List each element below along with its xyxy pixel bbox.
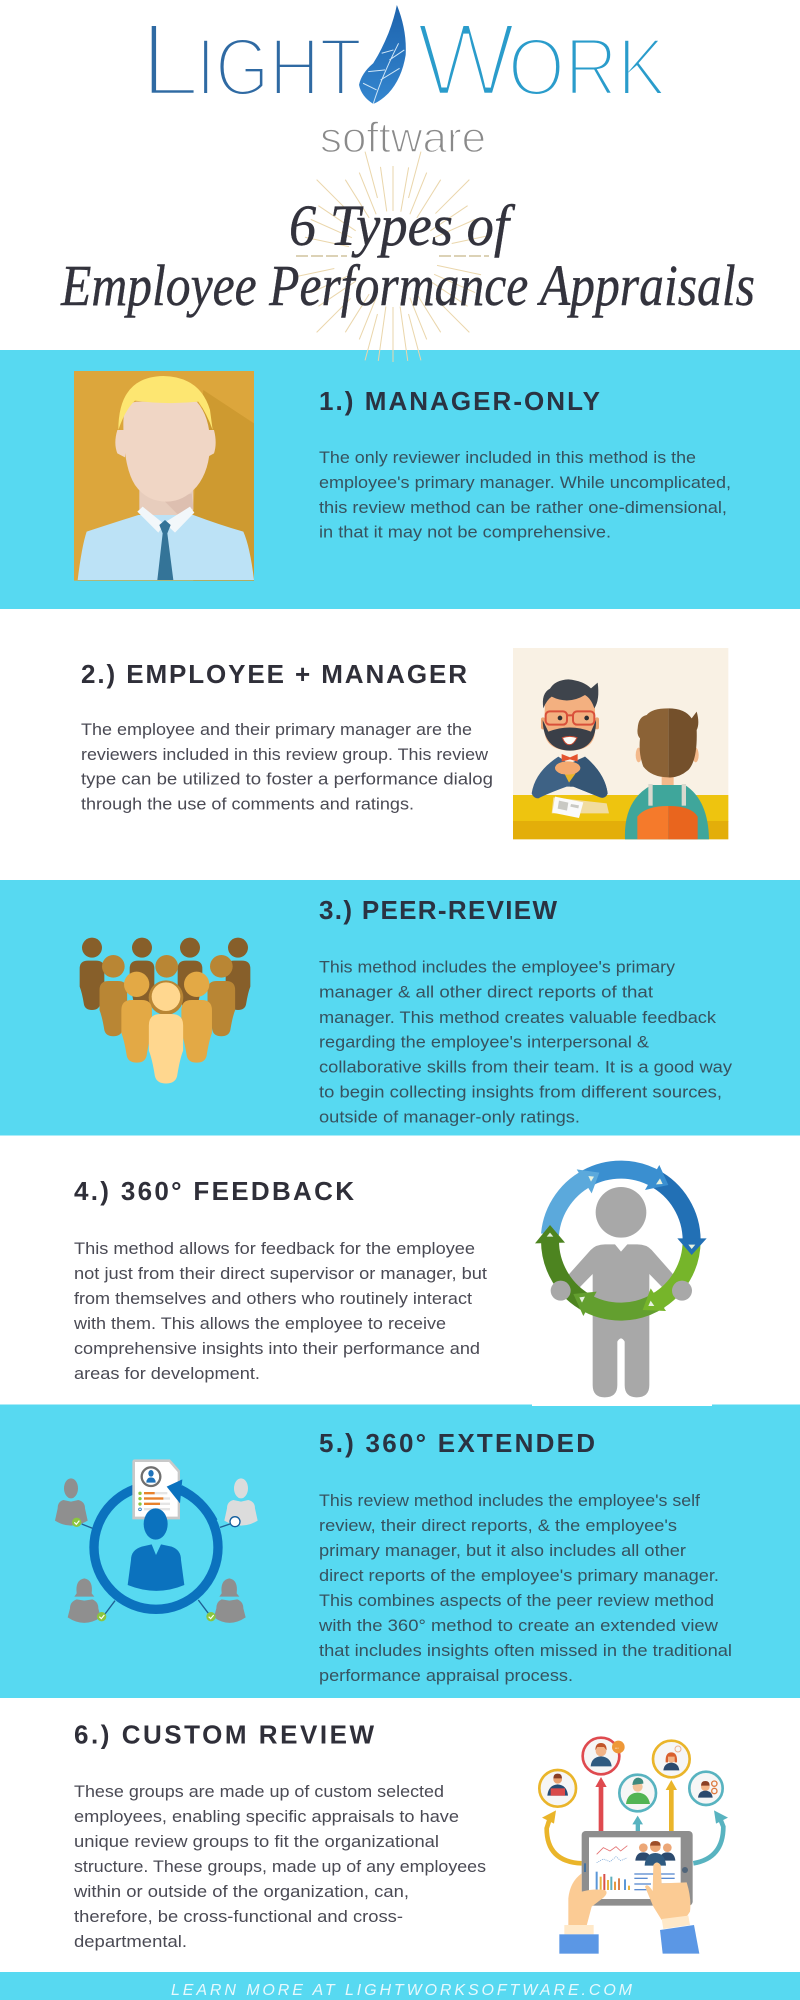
panel: peer-review band — [0, 880, 800, 1136]
logo: LightWork software: W — [416, 2, 516, 119]
text block: custom review description: within or outside of the organization, can, — [73, 1882, 409, 1901]
text block: 360 feedback description: comprehensive insights into their performance and — [74, 1339, 480, 1358]
text block: 360 extended description — [318, 1491, 732, 1685]
heading: 2 employee + manager: 2.) EMPLOYEE + MANAGER — [81, 659, 467, 689]
panel: 360 extended band — [0, 1404, 800, 1698]
text block: 360 feedback description: areas for development. — [74, 1364, 260, 1383]
text block: employee + manager description: reviewers included in this review group. This review — [81, 745, 489, 764]
text block: peer-review description: to begin collecting insights from different sources, — [319, 1082, 722, 1102]
footer: learn more banner — [0, 1972, 800, 2000]
heading: 5 360 extended: 5.) 360° EXTENDED — [319, 1428, 595, 1458]
text block: manager-only description: in that it may not be comprehensive. — [319, 522, 611, 542]
heading: 1 manager-only: 1.) MANAGER-ONLY — [319, 386, 600, 416]
icon: group of people — [80, 938, 250, 1084]
text block: 360 extended description: primary manager, but it also includes all other — [319, 1541, 686, 1560]
text block: 360 extended description: direct reports of the employee's primary manager. — [319, 1566, 719, 1585]
text block: 360 extended description: with the 360° method to create an extended view — [318, 1616, 719, 1635]
text block: 360 extended description: review, their direct reports, & the employee's — [319, 1516, 677, 1535]
title: 6 Types of Employee Performance Appraisals: 6 Types of — [289, 193, 515, 258]
text block: 360 extended description: that includes insights often missed in the traditional — [319, 1641, 732, 1660]
text block: 360 extended description: This review method includes the employee's self — [319, 1491, 700, 1510]
icon: tablet with employee review groups: ... — [615, 1745, 619, 1751]
heading: 3 peer-review: 3.) PEER-REVIEW — [319, 895, 557, 925]
icon: manager portrait — [74, 371, 254, 581]
logo: LightWork software: software — [320, 114, 486, 162]
text block: 360 feedback description — [73, 1239, 487, 1383]
text block: employee + manager description: through the use of comments and ratings. — [81, 794, 414, 814]
icon: blue feather — [359, 5, 406, 104]
text block: employee + manager description: type can be utilized to foster a performance dialog — [81, 770, 493, 788]
panel: custom review — [73, 1720, 728, 1954]
text block: custom review description: employees, enabling specific appraisals to have — [74, 1807, 459, 1826]
panel: manager-only band — [0, 350, 800, 609]
text block: manager-only description: employee's primary manager. While uncomplicated, — [319, 473, 731, 492]
burst: tan sunburst behind title — [294, 152, 492, 362]
icon: person holding feedback cycle — [535, 1165, 707, 1397]
text block: employee + manager description: The employee and their primary manager are the — [81, 720, 472, 739]
text block: custom review description — [73, 1782, 486, 1951]
text block: peer-review description — [319, 958, 733, 1126]
text block: custom review description: therefore, be cross-functional and cross- — [74, 1907, 403, 1926]
text block: peer-review description: This method includes the employee's primary — [319, 958, 676, 976]
text block: custom review description: departmental. — [74, 1932, 187, 1951]
logo: LightWork software — [140, 2, 666, 162]
title: 6 Types of Employee Performance Appraisals — [60, 193, 755, 318]
text block: peer-review description: manager. This method creates valuable feedback — [319, 1008, 717, 1027]
text block: 360 feedback description: not just from their direct supervisor or manager, but — [74, 1264, 487, 1283]
text block: employee + manager description — [81, 720, 493, 814]
icon: manager and employee at a desk — [513, 648, 728, 839]
text block: manager-only description: The only reviewer included in this method is the — [319, 448, 696, 467]
text block: custom review description: structure. These groups, made up of any employees — [74, 1857, 486, 1876]
text block: manager-only description: this review method can be rather one-dimensional, — [319, 498, 727, 517]
text block: 360 extended description: performance appraisal process. — [319, 1666, 573, 1685]
text block: custom review description: unique review groups to fit the organizational — [74, 1832, 439, 1851]
logo: LightWork software: ORK — [508, 22, 666, 113]
text block: peer-review description: outside of manager-only ratings. — [319, 1108, 580, 1126]
text block: peer-review description: manager & all other direct reports of that — [319, 982, 653, 1002]
text block: peer-review description: collaborative skills from their team. It is a good way — [319, 1058, 733, 1076]
panel: 360 feedback — [73, 1165, 707, 1397]
panel: employee + manager — [81, 648, 728, 839]
text block: custom review description: These groups are made up of custom selected — [74, 1782, 444, 1801]
logo: LightWork software: IGHT — [196, 22, 362, 113]
text block: 360 feedback description: from themselves and others who routinely interact — [74, 1289, 472, 1308]
icon: tablet with employee review groups — [539, 1738, 728, 1954]
icon: 360 extended reviewers around employee — [55, 1459, 258, 1623]
heading: 6 custom review: 6.) CUSTOM REVIEW — [74, 1720, 374, 1750]
footer: learn more banner: LEARN MORE AT LIGHTWORKSOFTWARE.COM — [171, 1982, 633, 1999]
text block: 360 feedback description: This method allows for feedback for the employee — [74, 1239, 475, 1258]
text block: manager-only description — [319, 448, 731, 542]
heading: 4 360 feedback: 4.) 360° FEEDBACK — [74, 1176, 354, 1206]
text block: peer-review description: regarding the employee's interpersonal & — [319, 1032, 650, 1052]
text block: 360 feedback description: with them. This allows the employee to receive — [73, 1314, 446, 1333]
logo: LightWork software: L — [140, 2, 200, 119]
text block: 360 extended description: This combines aspects of the peer review method — [319, 1591, 714, 1610]
